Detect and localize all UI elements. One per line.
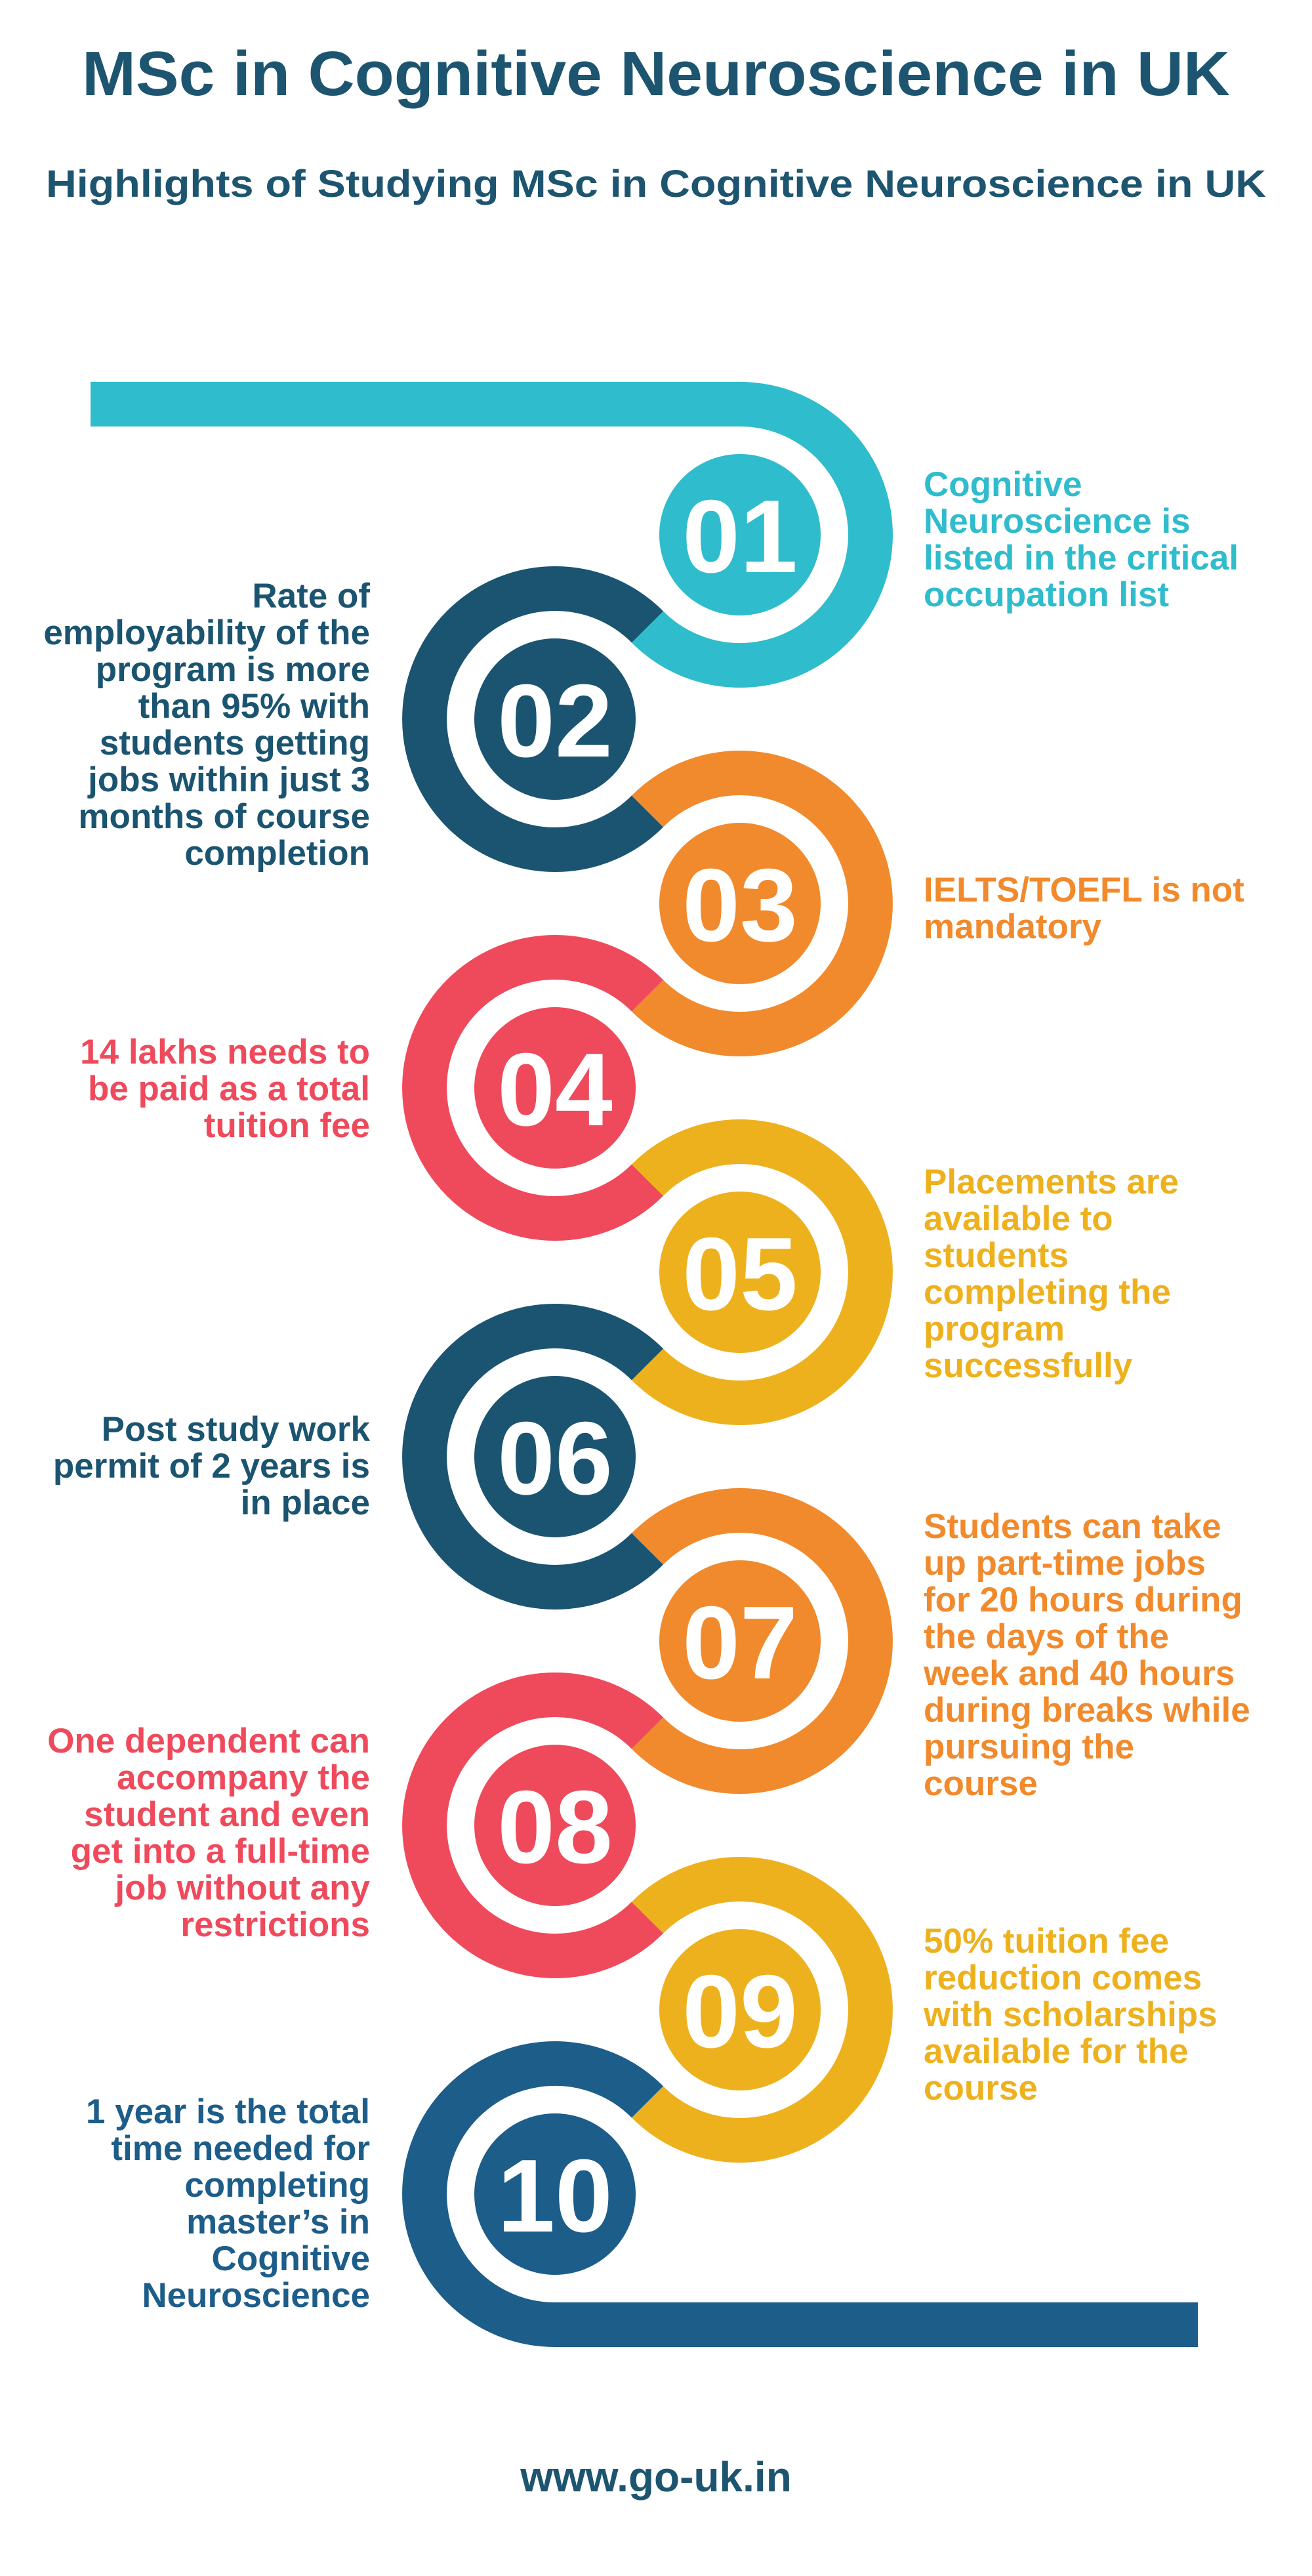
text 09: 50% tuition fee [924, 1922, 1169, 1961]
text 10: Cognitive [212, 2239, 370, 2278]
text 07: week and 40 hours [923, 1654, 1235, 1693]
text 09: course [924, 2069, 1038, 2108]
badge 03: 03 [682, 848, 798, 963]
text 02: than 95% with [138, 687, 370, 726]
text 08: get into a full-time [71, 1832, 370, 1871]
text 07: for 20 hours during [924, 1581, 1242, 1619]
text 06: permit of 2 years is [53, 1447, 370, 1485]
badge 01: 01 [682, 479, 798, 594]
text 10: master’s in [186, 2203, 370, 2241]
text 08: One dependent can [47, 1722, 370, 1760]
badge 01 [659, 454, 821, 615]
text 01: Cognitive [924, 465, 1082, 504]
text 05: completing the [924, 1273, 1171, 1312]
text 05: Placements are [924, 1163, 1179, 1201]
badge 10: 10 [497, 2138, 613, 2254]
badge 04: 04 [497, 1032, 613, 1148]
text 10: completing [184, 2166, 370, 2205]
text 02: employability of the [43, 613, 370, 652]
footer url: www.go-uk.in [520, 2453, 792, 2501]
text 09: reduction comes [924, 1959, 1202, 1997]
text 04: be paid as a total [88, 1070, 370, 1108]
text 08: student and even [84, 1795, 370, 1834]
text 07: up part-time jobs [924, 1544, 1206, 1583]
badge 08: 08 [497, 1770, 613, 1885]
badge 09: 09 [682, 1954, 798, 2069]
text 07: course [924, 1764, 1038, 1803]
text 07: pursuing the [924, 1728, 1134, 1766]
text 04: 14 lakhs needs to [80, 1033, 370, 1071]
badge 07: 07 [682, 1585, 798, 1701]
text 02: students getting [100, 724, 370, 762]
badge 05: 05 [682, 1216, 798, 1332]
text 09: with scholarships [923, 1995, 1218, 2034]
badge 09 [659, 1929, 821, 2090]
badge 02: 02 [497, 663, 613, 779]
text 03: IELTS/TOEFL is not [924, 871, 1244, 909]
text 06: in place [241, 1484, 370, 1522]
text 02: months of course [78, 797, 370, 836]
badge 06: 06 [497, 1401, 613, 1516]
badge 03 [659, 823, 821, 984]
text 07: Students can take [924, 1507, 1221, 1546]
text 01: occupation list [924, 575, 1169, 614]
text 09: available for the [924, 2032, 1189, 2071]
text 03: mandatory [924, 907, 1101, 946]
text 01: listed in the critical [924, 539, 1239, 577]
text 07: during breaks while [924, 1691, 1250, 1730]
text 06: Post study work [102, 1410, 371, 1449]
text 01: Neuroscience is [924, 502, 1191, 541]
text 05: program [924, 1310, 1065, 1348]
text 05: students [924, 1236, 1069, 1275]
badge 06 [474, 1376, 636, 1537]
text 02: completion [184, 834, 370, 873]
text 08: accompany the [117, 1758, 370, 1797]
text 10: Neuroscience [142, 2276, 370, 2315]
text 05: available to [924, 1199, 1113, 1238]
text 04: tuition fee [204, 1106, 370, 1145]
text 07: the days of the [924, 1617, 1169, 1656]
badge 08 [474, 1745, 636, 1906]
text 08: job without any [114, 1869, 371, 1907]
badge 05 [659, 1192, 821, 1353]
text 02: jobs within just 3 [87, 760, 370, 799]
text 02: Rate of [252, 577, 370, 615]
title: MSc in Cognitive Neuroscience in UK [82, 39, 1230, 109]
badge 10 [474, 2113, 636, 2275]
badge 04 [474, 1007, 636, 1169]
subtitle: Highlights of Studying MSc in Cognitive Neuroscience in UK [46, 163, 1266, 205]
text 10: time needed for [111, 2129, 370, 2168]
text 05: successfully [924, 1346, 1133, 1385]
text 08: restrictions [180, 1905, 370, 1944]
text 10: 1 year is the total [86, 2092, 370, 2131]
timeline path [91, 404, 1198, 2325]
text 02: program is more [96, 650, 370, 689]
badge 07 [659, 1560, 821, 1722]
badge 02 [474, 638, 636, 800]
